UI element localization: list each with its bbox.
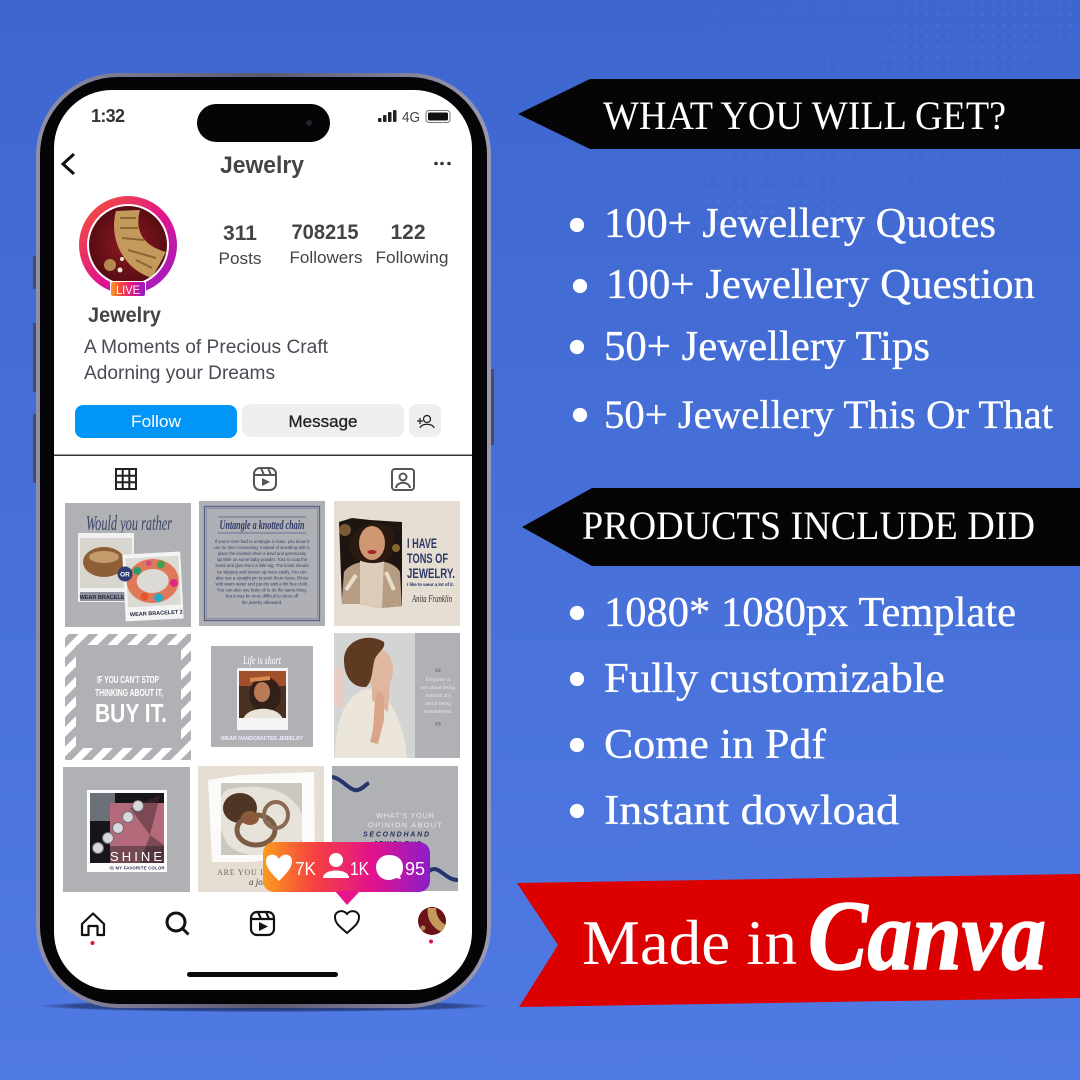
post: buy it: BUY IT. (95, 698, 167, 728)
phone mockup (33, 73, 494, 1012)
icon: reels (251, 912, 274, 935)
post: secondhand jewelry: OPINION ABOUT (368, 820, 442, 830)
profile bio: A Moments of Precious Craft (84, 337, 329, 358)
following stat: Following (376, 248, 448, 267)
post: untangle a knotted chain: also use a straight pin to work them loose. Rinse (216, 576, 309, 580)
post: elegance quote: not about being (421, 685, 456, 691)
icon: reels tab (254, 468, 276, 490)
post: untangle a knotted chain (199, 501, 325, 626)
post: buy it: THINKING ABOUT IT, (95, 687, 163, 699)
post: shine (63, 767, 190, 892)
time: 1:32 (91, 106, 125, 126)
icon: comment bubble (376, 855, 403, 880)
profile title: Jewelry (220, 152, 305, 179)
post: elegance quote: noticed. It's (425, 693, 451, 699)
icon: activity heart (335, 911, 359, 933)
post: untangle a knotted chain: You can also use baby oil to do the same thing, (217, 588, 307, 592)
avatar with live ring (79, 196, 177, 297)
post: elegance quote: ” (434, 720, 442, 735)
battery (426, 110, 450, 122)
post: untangle a knotted chain: can be time consuming. Instead of wrestling with it, (214, 545, 310, 550)
post: would you rather: WEAR BRACELET 2 (130, 609, 183, 618)
posts stat (218, 222, 262, 268)
post: i have tons of jewelry: I like to wear a lot of it. (407, 582, 454, 588)
post: i have tons of jewelry: JEWELRY. (407, 566, 455, 581)
post: life is short: WEAR HANDCRAFTED JEWELRY (221, 736, 304, 742)
post: i have tons of jewelry: TONS OF (407, 551, 448, 566)
post: would you rather: OR (120, 572, 130, 578)
followers stat: 708215 (292, 221, 359, 244)
post: buy it: IF YOU CAN'T STOP (97, 674, 159, 686)
following stat: 122 (390, 221, 426, 244)
bullet item: Fully customizable (604, 656, 945, 702)
banner: products include (522, 488, 1080, 566)
followers stat (290, 221, 362, 267)
bullet item: 100+ Jewellery Question (606, 262, 1035, 308)
like count: 7K (295, 859, 316, 879)
background dot texture (706, 2, 1080, 212)
island camera (306, 120, 312, 126)
bullet item: Come in Pdf (604, 722, 826, 768)
post: secondhand jewelry (332, 766, 458, 891)
network label: 4G (402, 109, 420, 126)
post: would you rather: WEAR BRACELET 1 (80, 595, 132, 601)
profile stats (218, 221, 448, 268)
profile name: Jewelry (88, 304, 161, 327)
active dot (429, 940, 433, 944)
post: are you doing: ARE YOU DOING (217, 868, 290, 877)
message button: Message (288, 412, 358, 431)
list: products include (570, 590, 1016, 834)
posts stat: Posts (218, 249, 262, 268)
comment count: 95 (405, 859, 425, 879)
post: untangle a knotted chain: sprinkle on some baby powder. Toss to coat the (217, 557, 308, 562)
add person button (409, 404, 441, 437)
post: buy it (65, 634, 191, 760)
post: untangle a knotted chain: with warm water and pat dry with a lint free cloth. (216, 582, 308, 586)
posts stat: 311 (223, 222, 257, 245)
post: shine: IS MY FAVORITE COLOR (110, 866, 165, 870)
bullet item: 50+ Jewellery Tips (604, 324, 930, 370)
icon: home (82, 914, 104, 935)
post: untangle a knotted chain: Untangle a knotted chain (220, 518, 305, 532)
bullet item: Instant dowload (604, 788, 899, 834)
phone ground shadow (37, 1000, 493, 1012)
follower count: 1K (350, 859, 369, 879)
signal bars (378, 110, 396, 122)
bullet item: 50+ Jewellery This Or That (604, 392, 1053, 437)
phone screen (54, 90, 472, 990)
post: are you doing (198, 766, 324, 892)
icon: person (323, 853, 349, 878)
follow button: Follow (131, 412, 182, 431)
post: elegance quote (334, 633, 460, 758)
post: elegance quote: about being (425, 701, 451, 707)
follow button (75, 405, 237, 438)
post: elegance quote: remembered. (424, 709, 452, 715)
post: secondhand jewelry: WHAT'S YOUR (376, 811, 435, 820)
post: i have tons of jewelry: I HAVE (407, 536, 437, 551)
profile bio: Adorning your Dreams (84, 363, 275, 384)
bottom navigation (82, 907, 446, 945)
post: shine: SHINE (110, 849, 162, 864)
post: untangle a knotted chain: be slippery and loosen up more easily. You can (217, 570, 307, 574)
home indicator (187, 972, 338, 977)
status bar (91, 104, 450, 142)
post: i have tons of jewelry (334, 501, 460, 626)
banner: what you will get (518, 79, 1080, 149)
icon: heart (266, 855, 292, 881)
profile header (63, 152, 451, 179)
made in label: Made in (582, 907, 797, 978)
post: i have tons of jewelry: Anita Franklin (411, 593, 452, 605)
message button (242, 404, 404, 437)
post: life is short: Life is short (242, 653, 281, 667)
bullet item: 100+ Jewellery Quotes (604, 201, 996, 247)
live badge: LIVE (116, 283, 140, 297)
list: what you will get (570, 201, 1053, 437)
post: untangle a knotted chain: knots and give them a little tug. The knots should (215, 563, 309, 568)
banner: products include: PRODUCTS INCLUDE DID (582, 503, 1035, 548)
post: untangle a knotted chain: but it may be more difficult to clean off (226, 594, 299, 598)
bullet item: 1080* 1080px Template (604, 590, 1016, 636)
notification badge (263, 842, 430, 905)
phone side buttons (33, 256, 494, 483)
post: elegance quote: Elegance is (424, 677, 451, 683)
post: untangle a knotted chain: If you're ever had to untangle a chain, you know it (215, 539, 310, 544)
post: secondhand jewelry: JEWELRY? (373, 841, 422, 848)
more menu (434, 162, 451, 165)
active dot (90, 941, 94, 945)
icon: search (167, 913, 188, 934)
post: life is short (211, 646, 313, 747)
profile thumbnail (418, 907, 446, 935)
post: untangle a knotted chain: the jewelry afterward. (242, 600, 282, 605)
icon: tagged tab (392, 469, 414, 490)
post: secondhand jewelry: SECONDHAND (363, 832, 429, 838)
post: are you doing: a journey (249, 877, 283, 887)
post: elegance quote: “ (434, 666, 442, 681)
icon: grid tab (116, 469, 136, 489)
back arrow (63, 154, 74, 174)
phone frame (36, 73, 491, 1008)
profile divider (54, 454, 472, 456)
followers stat: Followers (290, 248, 362, 267)
following stat (376, 221, 448, 267)
dynamic island (197, 104, 330, 142)
profile bio (84, 337, 329, 384)
post: would you rather: Would you rather (86, 511, 172, 535)
post: would you rather (65, 503, 191, 627)
phone bezel (40, 77, 487, 1004)
canva wordmark: Canva (808, 880, 1046, 991)
post: untangle a knotted chain: place the knotted chain a bowl and generously (218, 551, 307, 556)
ribbon: made in canva (517, 874, 1080, 1007)
post grid (63, 501, 460, 892)
banner: what you will get: WHAT YOU WILL GET? (603, 93, 1006, 138)
